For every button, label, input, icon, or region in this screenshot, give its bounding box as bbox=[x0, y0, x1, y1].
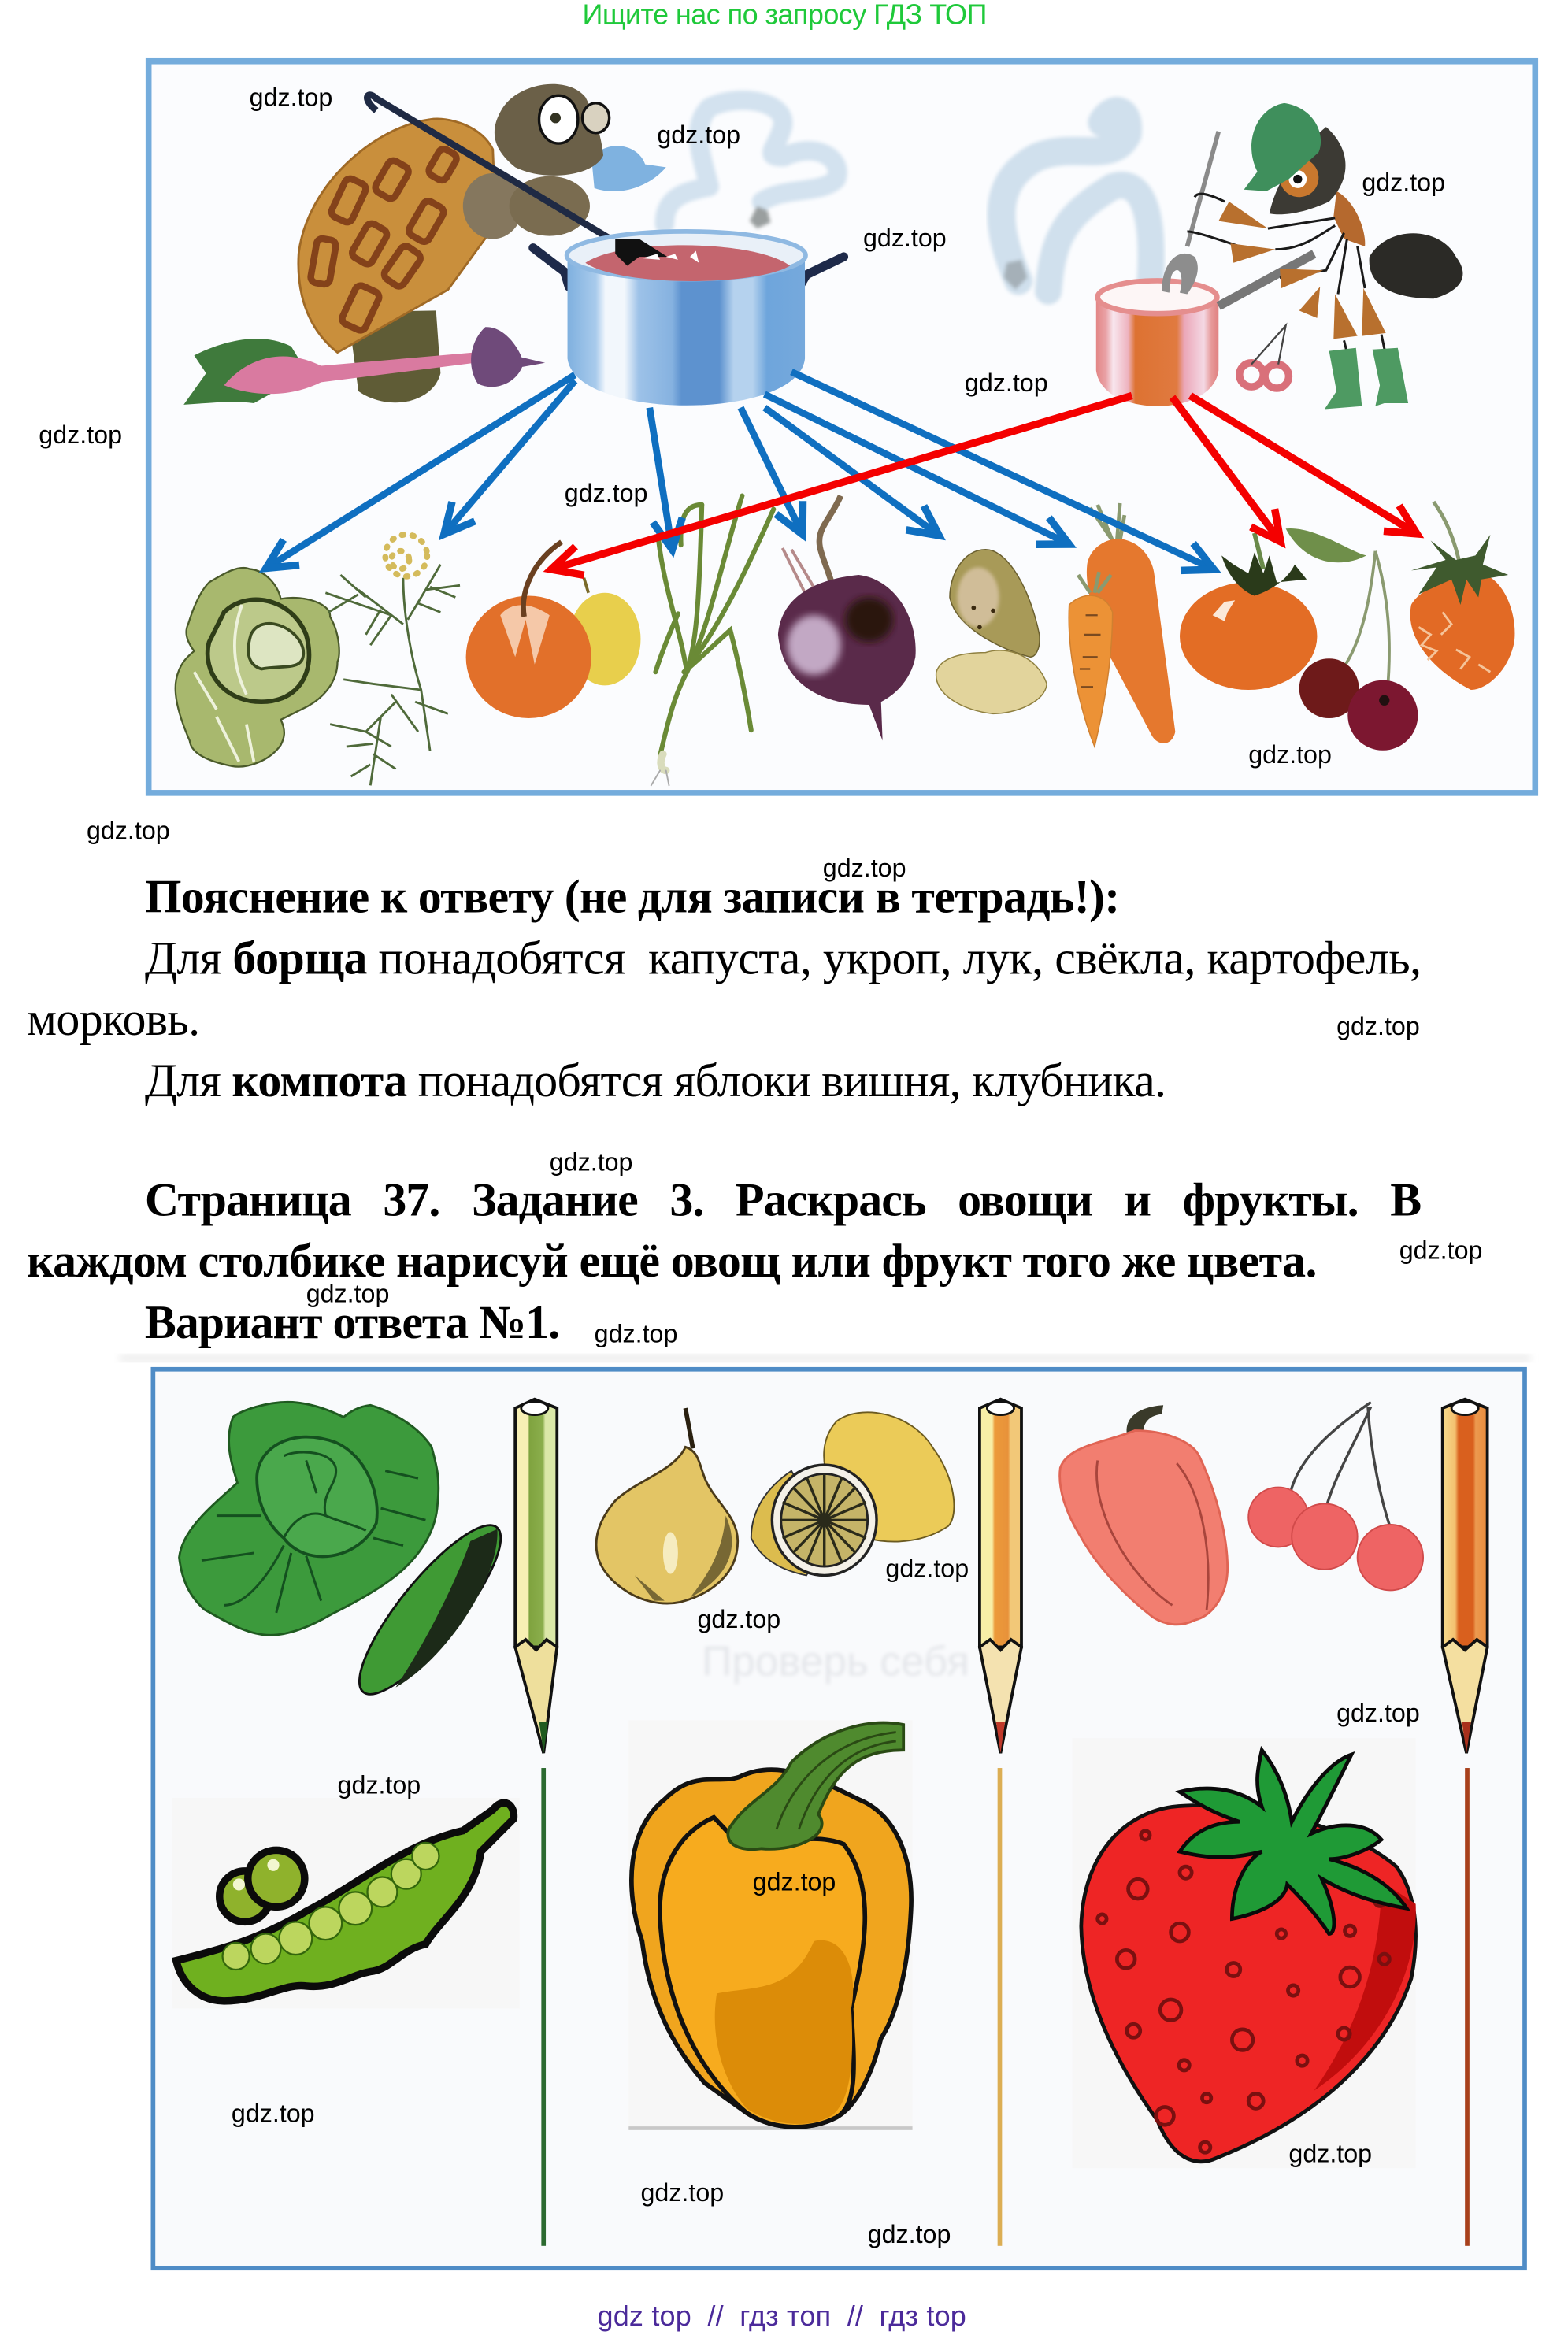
watermark labels: gdz.top bbox=[657, 120, 740, 149]
watermark labels: gdz.top bbox=[823, 854, 906, 882]
icon: steam over compote pot bbox=[1001, 111, 1151, 291]
watermark labels: gdz.top bbox=[965, 369, 1048, 397]
column line: yellow bbox=[998, 1768, 1002, 2246]
watermark labels: gdz.top bbox=[868, 2220, 951, 2248]
text block: task heading: каждом столбике нарисуй ещё овощ или фрукт того же цвета. bbox=[27, 1235, 1317, 1287]
watermark labels: gdz.top bbox=[640, 2178, 724, 2207]
text block: task heading: Страница 37. Задание 3. Раскрась овощи и фрукты. В bbox=[145, 1173, 1422, 1225]
icon: pea pod bbox=[172, 1798, 520, 2008]
icon: beetroot bbox=[778, 496, 916, 740]
watermark labels: gdz.top bbox=[306, 1279, 389, 1307]
icon: steam over large pot bbox=[665, 100, 837, 228]
watermark labels: gdz.top bbox=[863, 224, 947, 252]
text block: explanation: Для борща понадобятся капуста, укроп, лук, свёкла, картофель, bbox=[145, 932, 1422, 984]
watermark labels: gdz.top bbox=[595, 1320, 677, 1348]
watermark labels: gdz.top bbox=[1248, 740, 1332, 769]
icon: green cabbage bbox=[180, 1402, 439, 1635]
watermark labels: gdz.top bbox=[550, 1148, 632, 1177]
watermark labels: gdz.top bbox=[1336, 1012, 1420, 1040]
icon: green onion bbox=[651, 496, 773, 785]
watermark labels: gdz.top bbox=[1288, 2140, 1372, 2168]
watermark labels: gdz.top bbox=[565, 479, 647, 507]
icon: red strawberry bbox=[1072, 1738, 1416, 2168]
icon: cherries bbox=[1286, 528, 1418, 751]
panel: soup and compote illustration bbox=[149, 61, 1535, 793]
icon: compote pot bbox=[1096, 254, 1218, 406]
icon: ant cook bbox=[1187, 103, 1462, 410]
column line: green bbox=[541, 1768, 546, 2246]
watermark labels: gdz.top bbox=[1399, 1236, 1482, 1264]
faint print-through text: Проверь себя bbox=[702, 1638, 969, 1685]
text block: explanation: морковь. bbox=[27, 993, 200, 1045]
watermark labels: gdz.top bbox=[338, 1770, 421, 1799]
arrows: borscht ingredients bbox=[267, 372, 1213, 569]
watermark labels: gdz.top bbox=[698, 1605, 780, 1633]
icon: cucumber bbox=[340, 1509, 520, 1711]
text block: explanation: Пояснение к ответу (не для записи в тетрадь!): bbox=[145, 871, 1120, 923]
icon: apples bbox=[466, 542, 640, 718]
watermark labels: gdz.top bbox=[885, 1554, 969, 1582]
arrows: compote ingredients bbox=[553, 395, 1416, 569]
icon: beet under turtle bbox=[183, 327, 545, 405]
watermark labels: gdz.top bbox=[1362, 169, 1445, 197]
icon: red pencil bbox=[1443, 1399, 1488, 1753]
icon: potatoes bbox=[936, 550, 1047, 713]
watermark labels: gdz.top bbox=[39, 421, 122, 449]
icon: big blue pot bbox=[533, 232, 843, 406]
icon: orange pencil bbox=[980, 1399, 1021, 1753]
icon: pear bbox=[596, 1408, 738, 1603]
footer links: gdz top // гдз топ // гдз top bbox=[597, 2300, 966, 2332]
text block: explanation: Для компота понадобятся яблоки вишня, клубника. bbox=[145, 1054, 1166, 1106]
icon: cabbage bbox=[176, 568, 339, 767]
watermark labels: gdz.top bbox=[753, 1868, 836, 1896]
icon: carrots bbox=[1069, 503, 1175, 747]
watermark labels: gdz.top bbox=[1336, 1699, 1420, 1727]
text block: task heading bbox=[27, 1173, 1422, 1348]
icon: orange strawberry bbox=[1410, 502, 1514, 690]
column line: red bbox=[1465, 1768, 1470, 2246]
text block: task heading: Вариант ответа №1. bbox=[145, 1296, 560, 1348]
watermark labels: gdz.top bbox=[232, 2099, 315, 2127]
icon: turtle cook bbox=[298, 84, 669, 402]
panel: colouring task answer bbox=[120, 1355, 1531, 2268]
watermark labels: gdz.top bbox=[250, 83, 332, 112]
icon: tomato bbox=[1180, 533, 1317, 690]
icon: dill bbox=[325, 535, 460, 785]
icon: lemon bbox=[751, 1412, 954, 1575]
watermark labels: gdz.top bbox=[87, 817, 170, 845]
icon: red pepper bbox=[1060, 1405, 1228, 1625]
icon: red cherries bbox=[1248, 1402, 1423, 1590]
icon: yellow bell pepper bbox=[628, 1720, 913, 2130]
text block: explanation bbox=[27, 871, 1422, 1106]
icon: green pencil bbox=[515, 1399, 557, 1753]
